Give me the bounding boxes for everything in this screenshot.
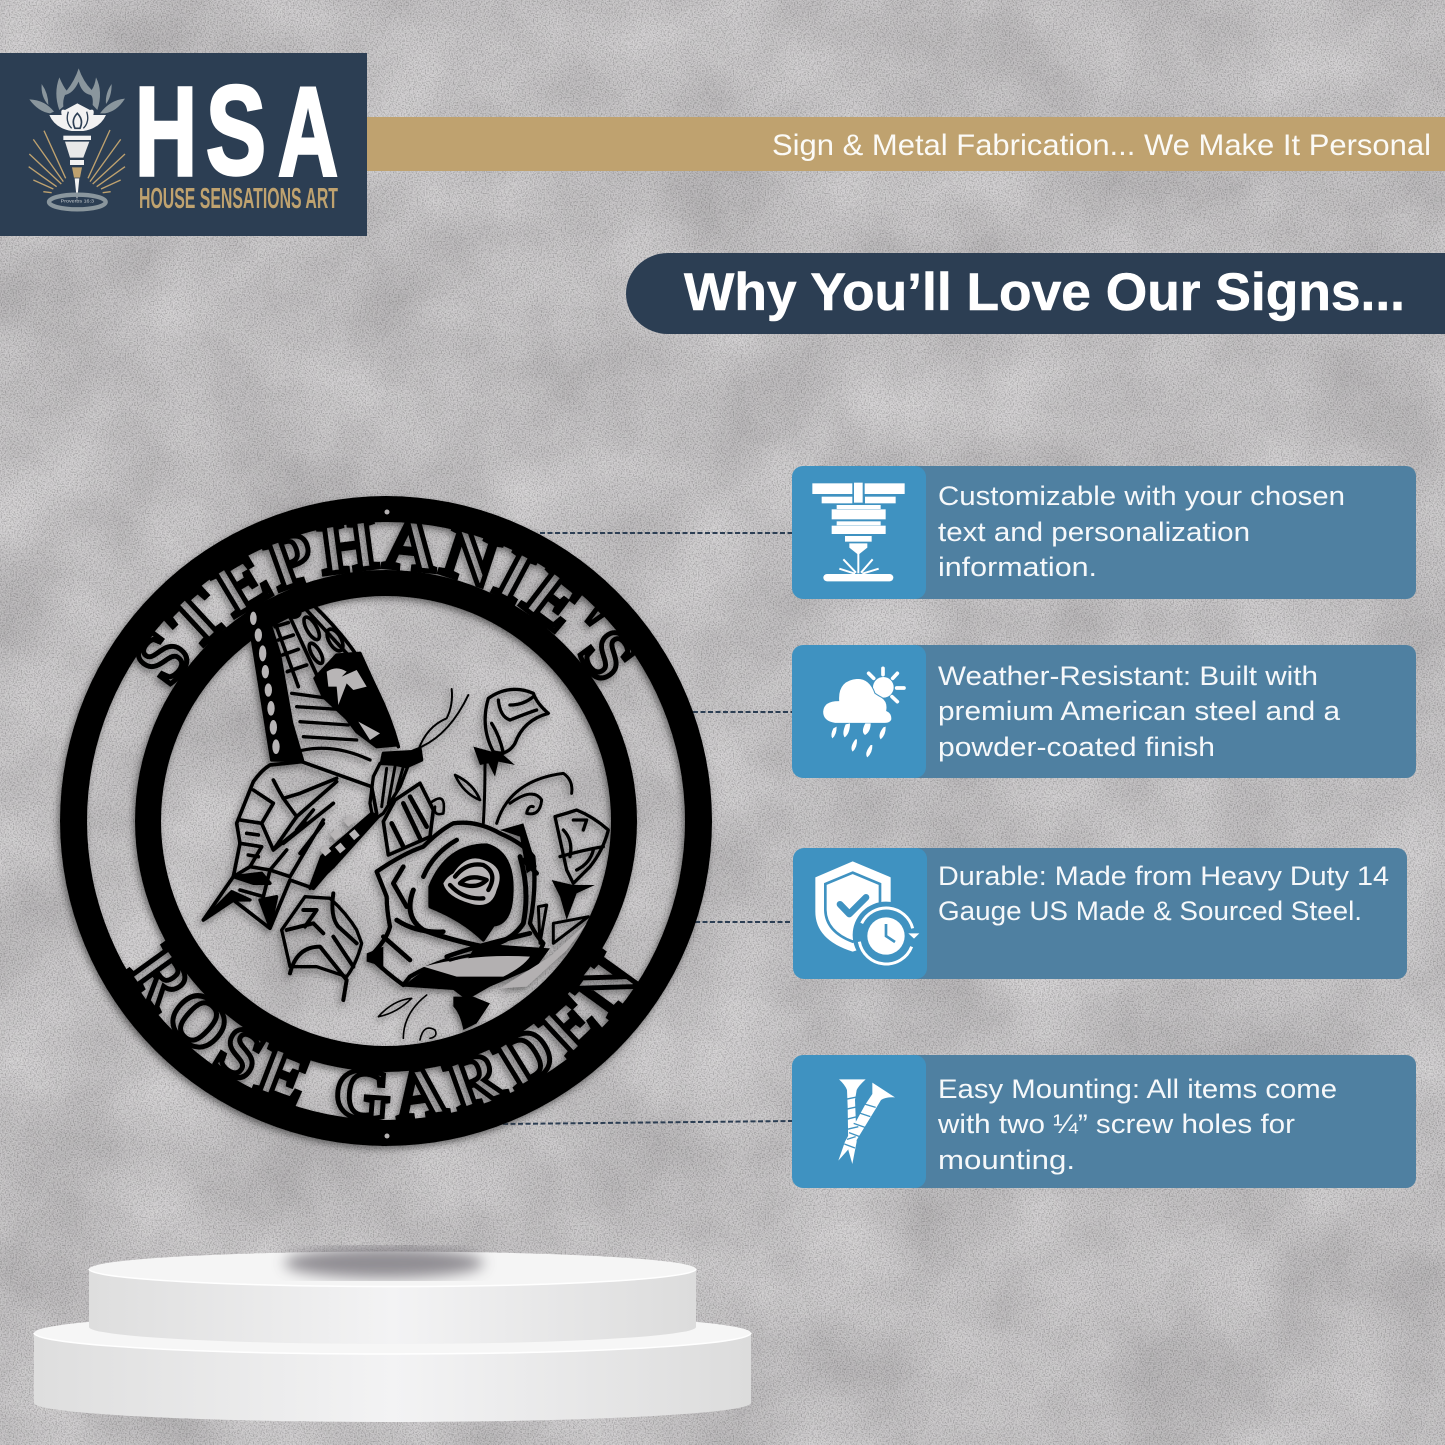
header bar: tagline: Sign & Metal Fabrication... We Make It Personal xyxy=(772,129,1431,162)
metal sign xyxy=(53,494,715,1154)
text: weather-resistant: Weather-Resistant: Built with xyxy=(938,661,1318,691)
butterfly lower wing xyxy=(203,762,378,928)
text: customizable: Customizable with your chosen xyxy=(938,481,1345,511)
text: easy mounting xyxy=(937,1074,1337,1175)
title pill xyxy=(626,253,1445,334)
sign text top: STEPHANIE'S xyxy=(132,522,636,693)
logo wordmark xyxy=(135,60,338,202)
logo wordmark: S xyxy=(206,60,266,201)
text: durable: Gauge US Made & Sourced Steel. xyxy=(938,896,1362,926)
mounting holes xyxy=(384,510,390,1138)
sign shadow on podium xyxy=(284,1248,484,1278)
feature panel: durable xyxy=(793,848,1407,979)
header bar: tagline xyxy=(360,117,1445,171)
icon box: screws xyxy=(792,1055,926,1188)
sign text bottom: ROSE GARDEN xyxy=(126,940,638,1120)
icon: torch with lotus flame xyxy=(29,68,125,209)
icon box: weather xyxy=(792,645,926,778)
rose stem and top bud xyxy=(455,689,572,823)
text: easy mounting: mounting. xyxy=(938,1145,1075,1175)
text: weather-resistant: premium American steel and a xyxy=(938,696,1340,726)
rose left bud xyxy=(282,893,383,1000)
logo wordmark: H xyxy=(135,61,197,202)
text: durable xyxy=(938,861,1389,926)
logo wordmark: A xyxy=(278,61,338,202)
logo subtitle: HOUSE SENSATIONS ART xyxy=(139,183,338,215)
butterfly upper wing xyxy=(247,605,398,761)
rose right bud xyxy=(538,810,608,943)
bottom swirl xyxy=(378,995,490,1040)
butterfly body and antennae xyxy=(370,689,468,855)
butterfly and rose artwork xyxy=(203,605,608,1040)
logo block xyxy=(0,53,367,236)
rose bloom xyxy=(370,823,587,1000)
feature panel: weather-resistant xyxy=(792,645,1416,778)
podium xyxy=(34,1248,751,1422)
feature panel: easy mounting xyxy=(792,1055,1416,1188)
icon: torch with lotus flame: Proverbs 16:3 xyxy=(61,199,94,205)
text: easy mounting: Easy Mounting: All items come xyxy=(938,1074,1337,1104)
title pill: Why You’ll Love Our Signs... xyxy=(684,263,1405,322)
text: weather-resistant: powder-coated finish xyxy=(938,732,1215,762)
text: easy mounting: with two ¼” screw holes for xyxy=(937,1109,1295,1139)
icon box: laser cutter xyxy=(792,466,926,599)
feature panel: customizable xyxy=(792,466,1416,599)
sign rings xyxy=(60,496,712,1146)
text: durable: Durable: Made from Heavy Duty 14 xyxy=(938,861,1389,891)
connector lines xyxy=(503,533,792,1124)
text: customizable: information. xyxy=(938,552,1097,582)
podium lower tier xyxy=(34,1312,751,1422)
text: customizable xyxy=(938,481,1345,582)
text: weather-resistant xyxy=(938,661,1340,762)
icon box: shield and clock xyxy=(793,848,927,979)
podium upper tier xyxy=(89,1252,696,1344)
text: customizable: text and personalization xyxy=(938,517,1250,547)
